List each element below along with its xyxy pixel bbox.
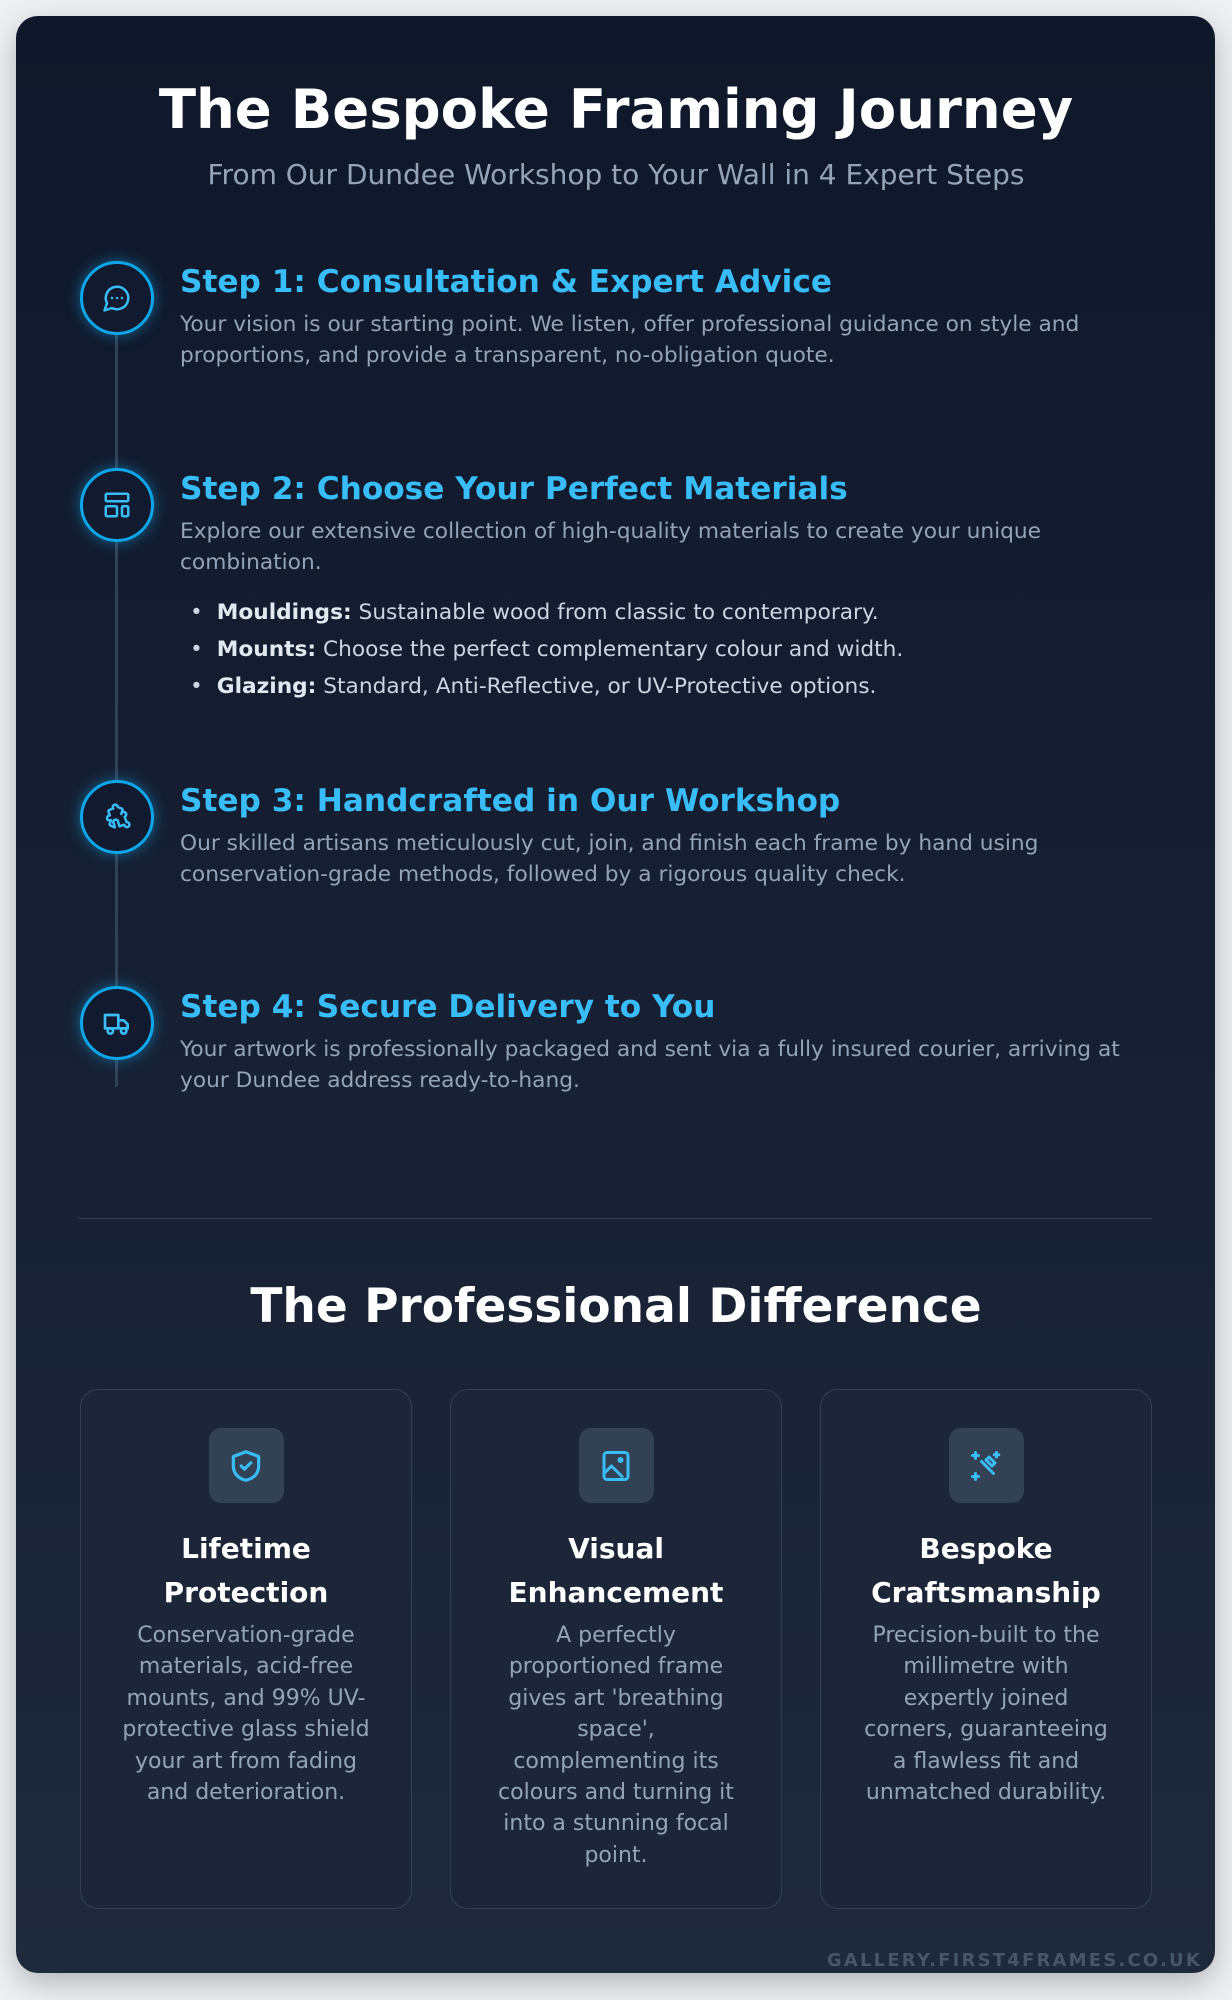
panel: visual enhancement	[450, 1389, 782, 1909]
timeline line	[115, 335, 118, 1087]
icon: layout	[80, 468, 154, 542]
step 4 text: Your artwork is professionally packaged and sent via a fully insured courier, arriving at your Dundee address ready-to-hang.	[180, 1037, 1120, 1093]
step 2 list: Mouldings: Sustainable wood from classic to contemporary.	[217, 600, 879, 625]
step 2 text: Explore our extensive collection of high-quality materials to create your unique combination.	[180, 519, 1041, 575]
panel: bespoke craftsmanship: Precision-built to the millimetre with expertly joined corners, guaranteeing a flawless fit and unmatched durability.	[864, 1623, 1108, 1805]
step 2 list: Mounts: Choose the perfect complementary colour and width.	[217, 637, 903, 662]
section heading: The Professional Difference	[250, 1279, 982, 1334]
panel: lifetime protection: Lifetime	[181, 1532, 311, 1565]
panel: bespoke craftsmanship	[820, 1389, 1152, 1909]
step 1 heading: Step 1: Consultation & Expert Advice	[180, 264, 832, 300]
panel: visual enhancement: Enhancement	[509, 1576, 723, 1609]
panel: bespoke craftsmanship: Craftsmanship	[871, 1576, 1101, 1609]
step 2 heading: Step 2: Choose Your Perfect Materials	[180, 471, 848, 507]
icon: truck	[80, 986, 154, 1060]
step 2 list	[193, 600, 903, 699]
panel: visual enhancement: Visual	[568, 1532, 664, 1565]
icon: chat	[80, 261, 154, 335]
step 3 text: Our skilled artisans meticulously cut, join, and finish each frame by hand using conservation-grade methods, followed by a rigorous quality check.	[180, 831, 1038, 887]
panel: lifetime protection: Protection	[164, 1576, 328, 1609]
panel: lifetime protection	[80, 1389, 412, 1909]
subtitle: From Our Dundee Workshop to Your Wall in 4 Expert Steps	[207, 158, 1025, 191]
step 1 text: Your vision is our starting point. We listen, offer professional guidance on style and proportions, and provide a transparent, no-obligation quote.	[180, 312, 1079, 368]
footer: GALLERY.FIRST4FRAMES.CO.UK	[827, 1950, 1202, 1971]
icon: puzzle	[80, 780, 154, 854]
step 4 heading: Step 4: Secure Delivery to You	[180, 989, 715, 1025]
title: The Bespoke Framing Journey	[159, 77, 1073, 141]
panel: bespoke craftsmanship: Bespoke	[919, 1532, 1053, 1565]
step 3 heading: Step 3: Handcrafted in Our Workshop	[180, 783, 840, 819]
icon: shield	[208, 1428, 284, 1503]
panel: visual enhancement: A perfectly proportioned frame gives art 'breathing space', complementing its colours and turning it into a stunning focal point.	[498, 1623, 734, 1868]
icon: image	[578, 1428, 654, 1503]
panel: lifetime protection: Conservation-grade materials, acid-free mounts, and 99% UV-protective glass shield your art from fading and deterioration.	[122, 1623, 370, 1805]
icon: tools	[948, 1428, 1024, 1503]
step 2 list: Glazing: Standard, Anti-Reflective, or UV-Protective options.	[217, 674, 876, 699]
